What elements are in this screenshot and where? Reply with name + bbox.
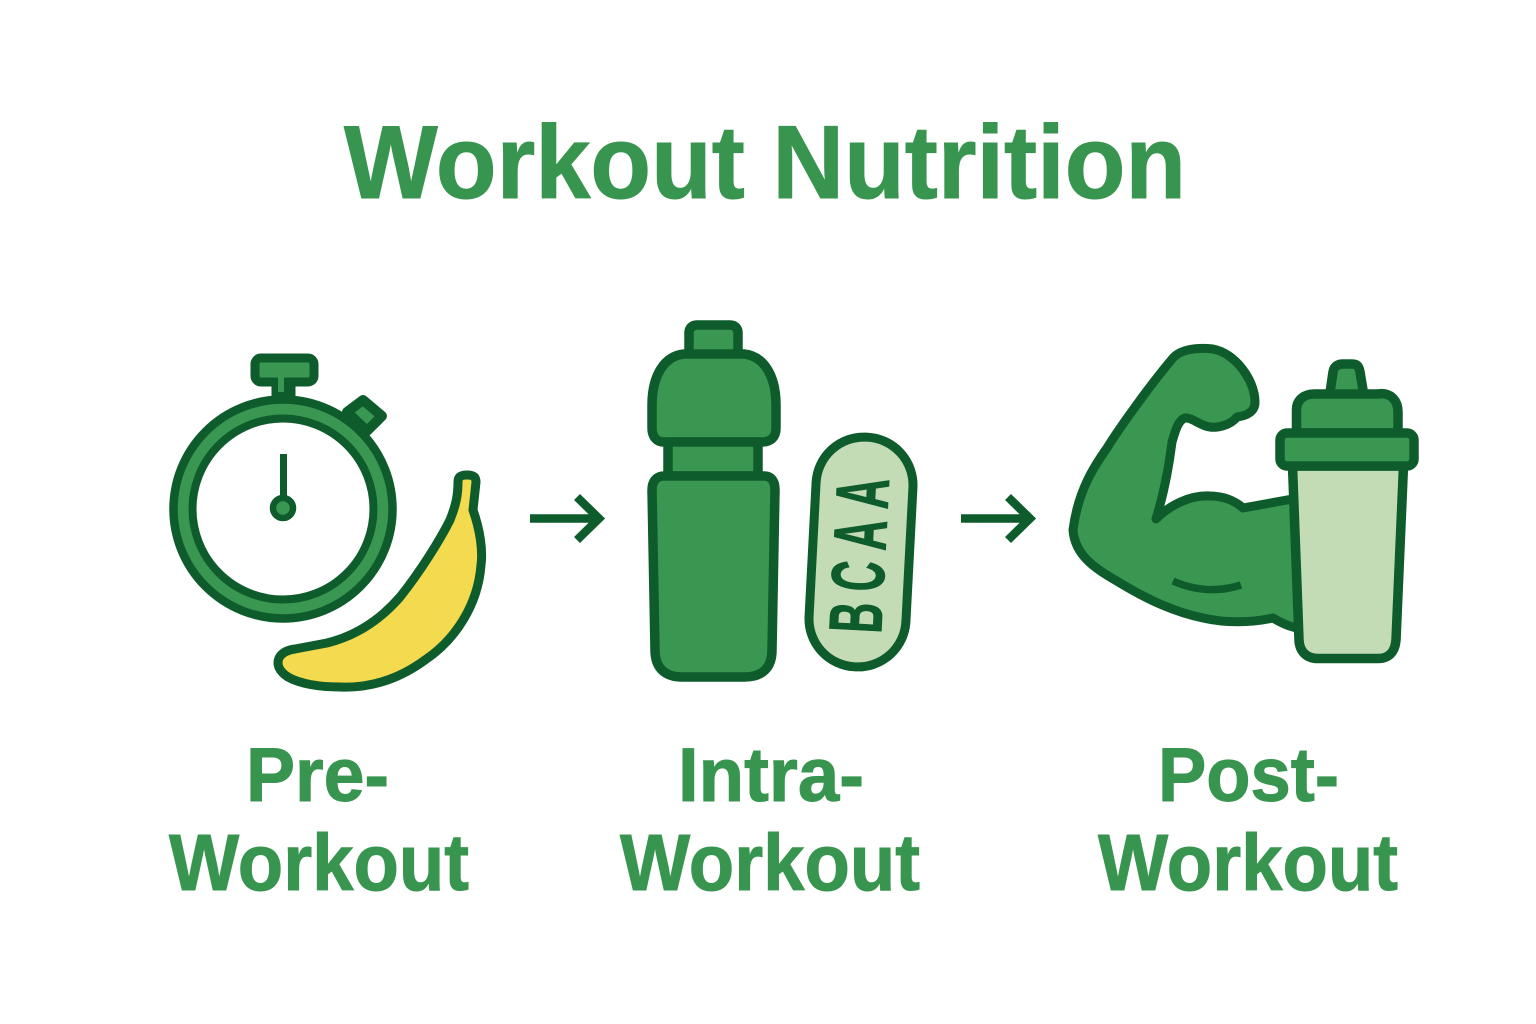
label: post-workout	[1098, 733, 1398, 907]
icon: water bottle	[652, 325, 776, 677]
arrow: pre to intra	[530, 497, 599, 540]
label: intra-workout	[620, 733, 920, 907]
title: Workout Nutrition	[344, 105, 1186, 221]
icon: shaker bottle	[1280, 364, 1414, 658]
icon: BCAA capsule	[807, 435, 915, 669]
icon: stopwatch	[174, 358, 392, 618]
capsule label: BCAA	[813, 465, 906, 635]
icon: banana	[278, 475, 482, 687]
label: post-workout: Workout	[1098, 818, 1398, 907]
label: pre-workout: Pre-	[246, 733, 389, 818]
label: intra-workout: Intra-	[678, 733, 864, 818]
label: pre-workout	[169, 733, 469, 907]
arrow: intra to post	[961, 497, 1030, 540]
label: intra-workout: Workout	[620, 818, 920, 907]
label: post-workout: Post-	[1158, 733, 1339, 818]
icon: flexed arm	[1073, 348, 1302, 630]
label: pre-workout: Workout	[169, 818, 469, 907]
